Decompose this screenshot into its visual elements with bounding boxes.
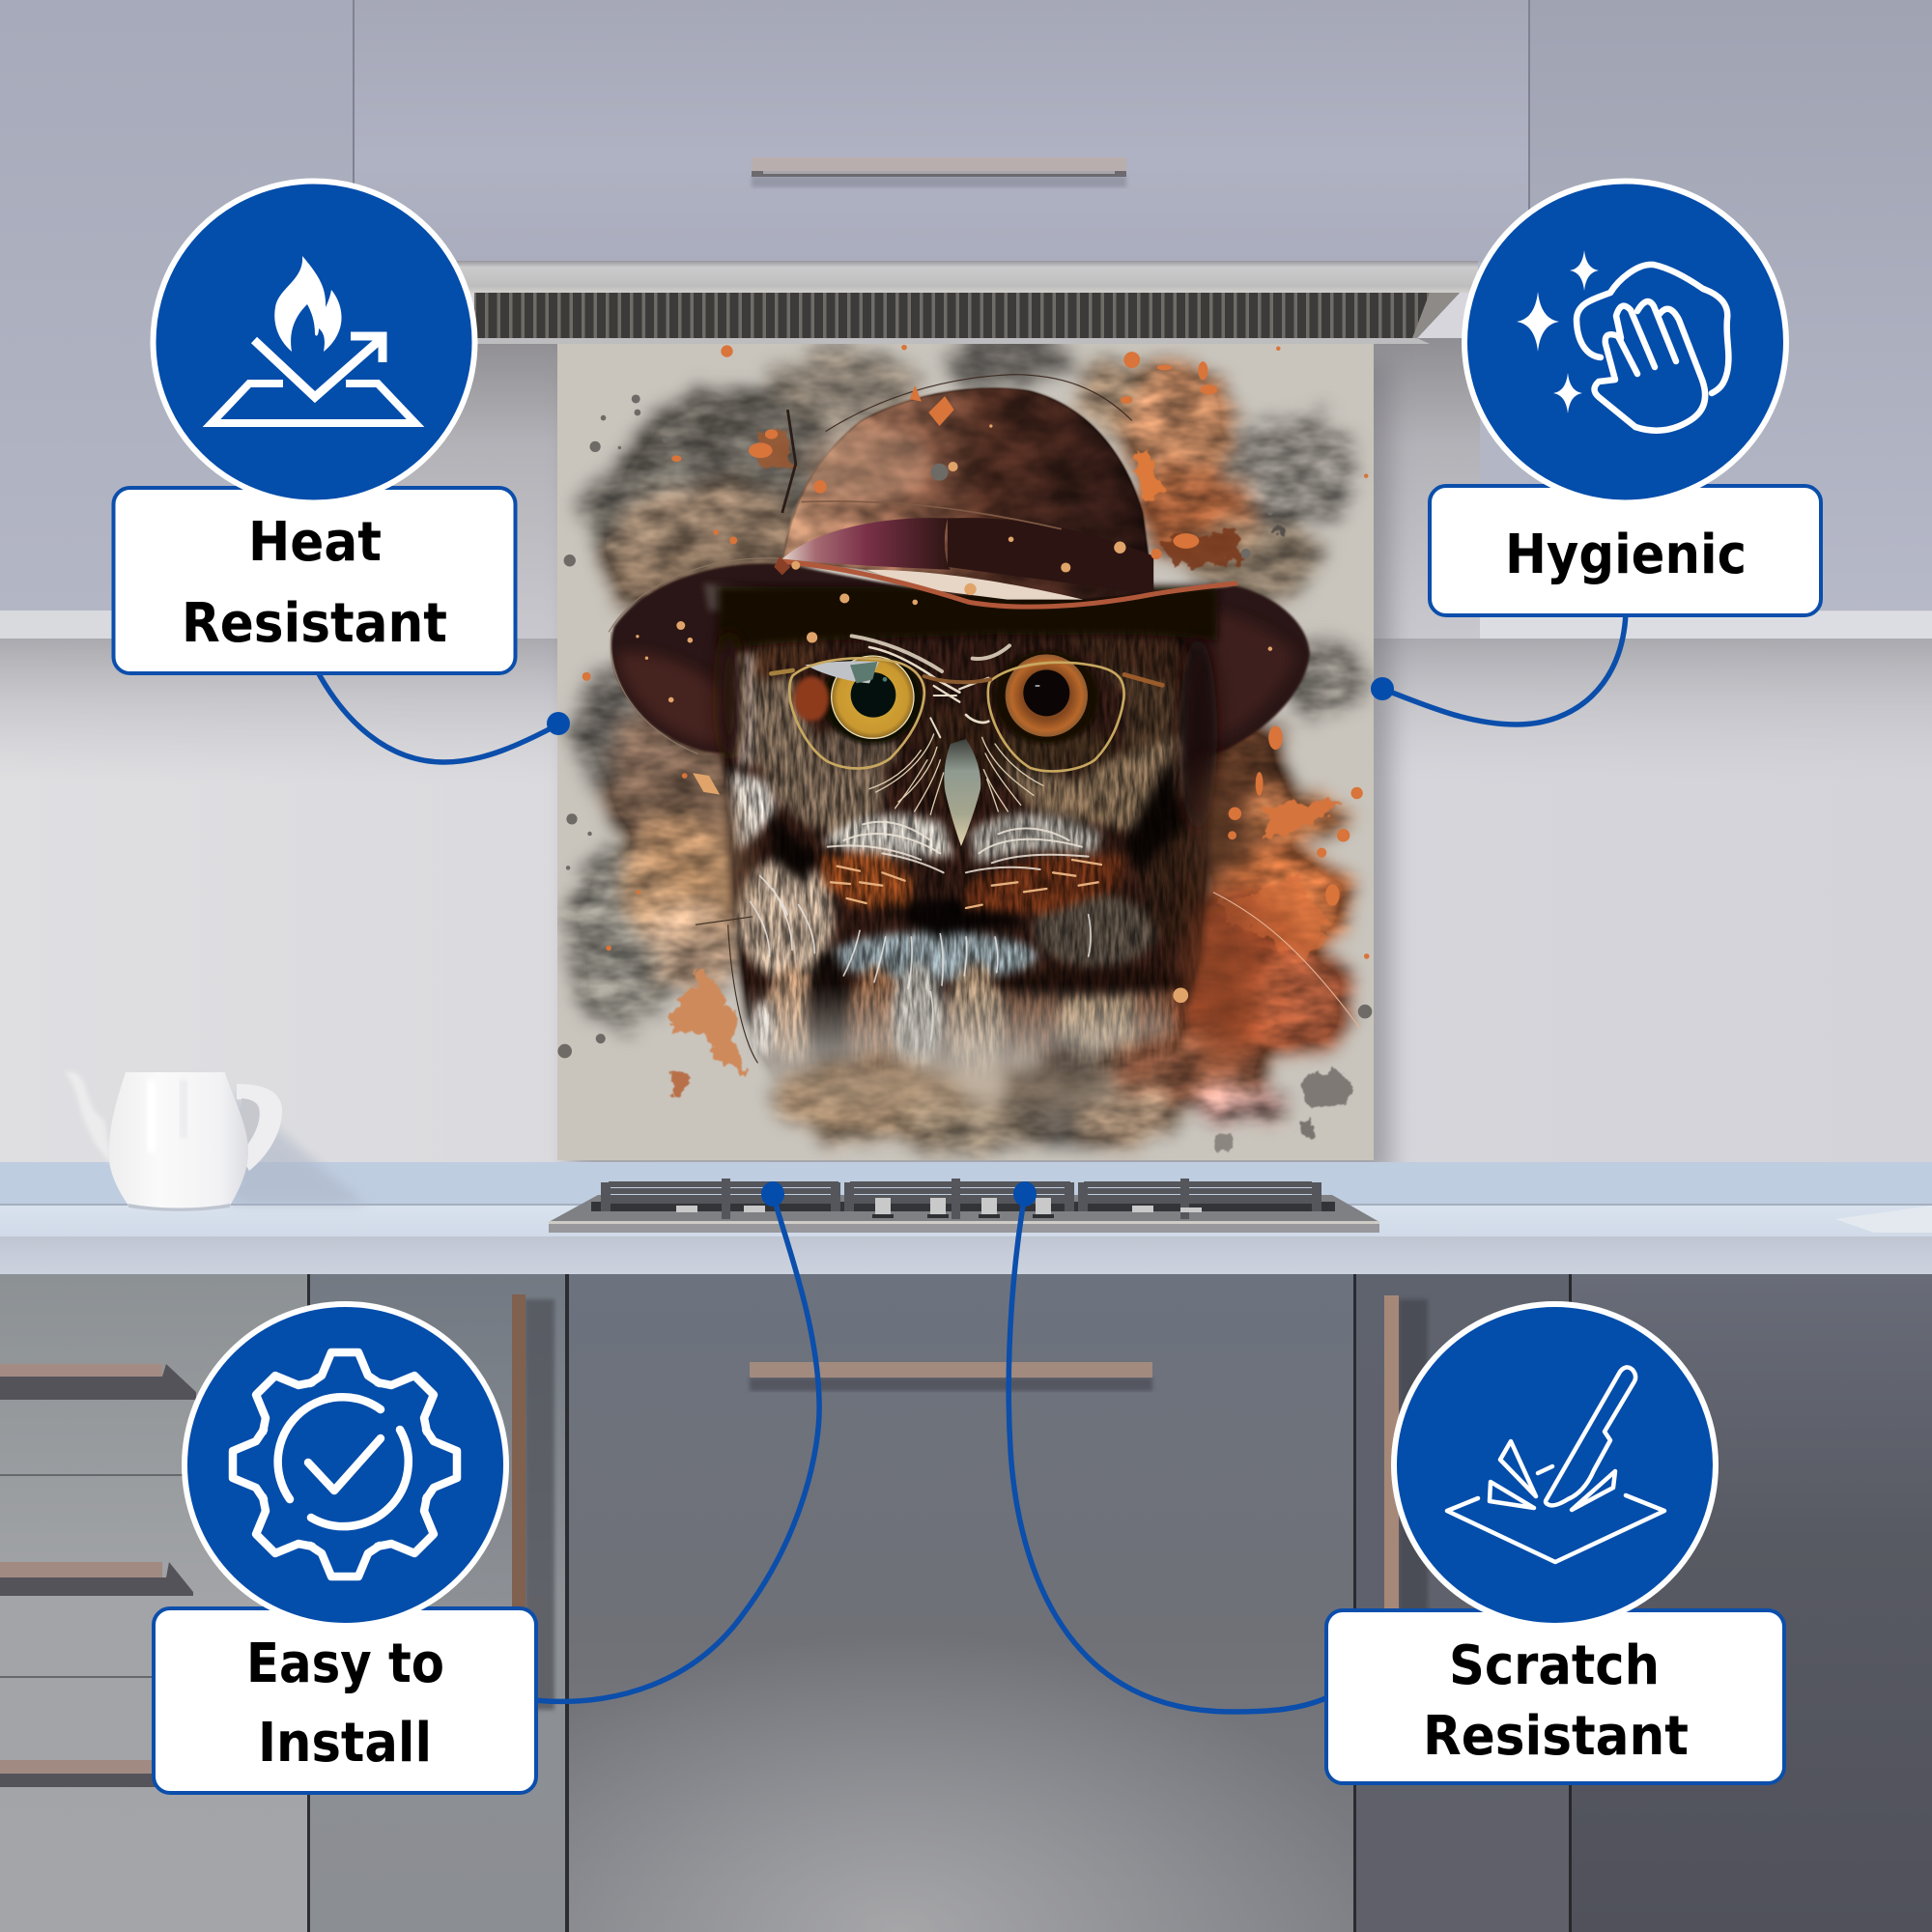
paint speckles (557, 345, 1372, 1058)
base cabinets (0, 1274, 1932, 1932)
red tint left of the eye (794, 676, 829, 722)
rust feather highlights (831, 860, 1101, 908)
heading: Resistant (182, 592, 447, 655)
soft edge washes over the head (712, 768, 1262, 1109)
label box (154, 1608, 536, 1793)
connector: Heat Resistant (316, 668, 570, 762)
heading: Heat (248, 511, 382, 574)
teapot (65, 1072, 367, 1211)
heading: Scratch (1449, 1634, 1660, 1697)
eye sockets (823, 650, 1099, 744)
heading: Easy to (246, 1633, 444, 1695)
icon: flame on surface (212, 256, 415, 423)
heading: Hygienic (1505, 524, 1747, 586)
brow feathers (852, 636, 1009, 737)
whisker strokes (869, 734, 1043, 814)
heading (182, 511, 447, 655)
wall tiles (0, 338, 1932, 1166)
icon: gear with check (233, 1352, 457, 1577)
icon: hand wiping with sparkles (1517, 250, 1728, 431)
right eye (1006, 654, 1088, 737)
splashback panel with owl artwork (557, 334, 1374, 1160)
left eye (805, 656, 914, 738)
connector: Easy to Install (533, 1181, 819, 1701)
callout: Easy to Install (154, 1304, 536, 1793)
panel base (557, 344, 1374, 1160)
drawer handles (0, 1364, 196, 1787)
gas hob (549, 1179, 1379, 1233)
centre door handle (750, 1362, 1152, 1391)
extractor hood (456, 261, 1478, 344)
beak (944, 739, 980, 846)
icon badge (153, 182, 475, 502)
callout: Scratch Resistant (1326, 1304, 1784, 1783)
icon badge (1464, 182, 1786, 502)
label box (1430, 486, 1821, 615)
icon badge (185, 1304, 506, 1626)
upper cabinet handle (752, 157, 1126, 187)
icon: knife scratching surface (1447, 1367, 1664, 1562)
upper cabinets (0, 0, 1932, 611)
icon badge (1394, 1304, 1716, 1626)
watercolour splashes (568, 334, 1365, 1155)
glasses (771, 658, 1162, 771)
owl head and feathers (718, 586, 1217, 1133)
callout: Heat Resistant (114, 182, 516, 673)
label box (114, 488, 516, 673)
heading: Resistant (1423, 1705, 1689, 1768)
heading (246, 1633, 444, 1775)
heading (1423, 1634, 1689, 1768)
callout: Hygienic (1430, 182, 1821, 615)
connector: Scratch Resistant (1009, 1181, 1328, 1712)
countertop (0, 1162, 1932, 1274)
connector: Hygienic (1371, 612, 1626, 724)
hat brim (609, 558, 1310, 756)
hat crown and band (696, 375, 1359, 1063)
chest highlights (751, 876, 1091, 1040)
wall shadow behind panel (570, 359, 1391, 1177)
vertical door handles (512, 1294, 1428, 1710)
soft feather masses (717, 634, 1213, 1080)
label box (1326, 1610, 1784, 1783)
heading: Install (258, 1712, 432, 1775)
shaded head sides merging with the brim (718, 631, 1217, 831)
muzzle feather strokes (828, 822, 1089, 872)
dark forehead under the brim (718, 586, 1217, 650)
